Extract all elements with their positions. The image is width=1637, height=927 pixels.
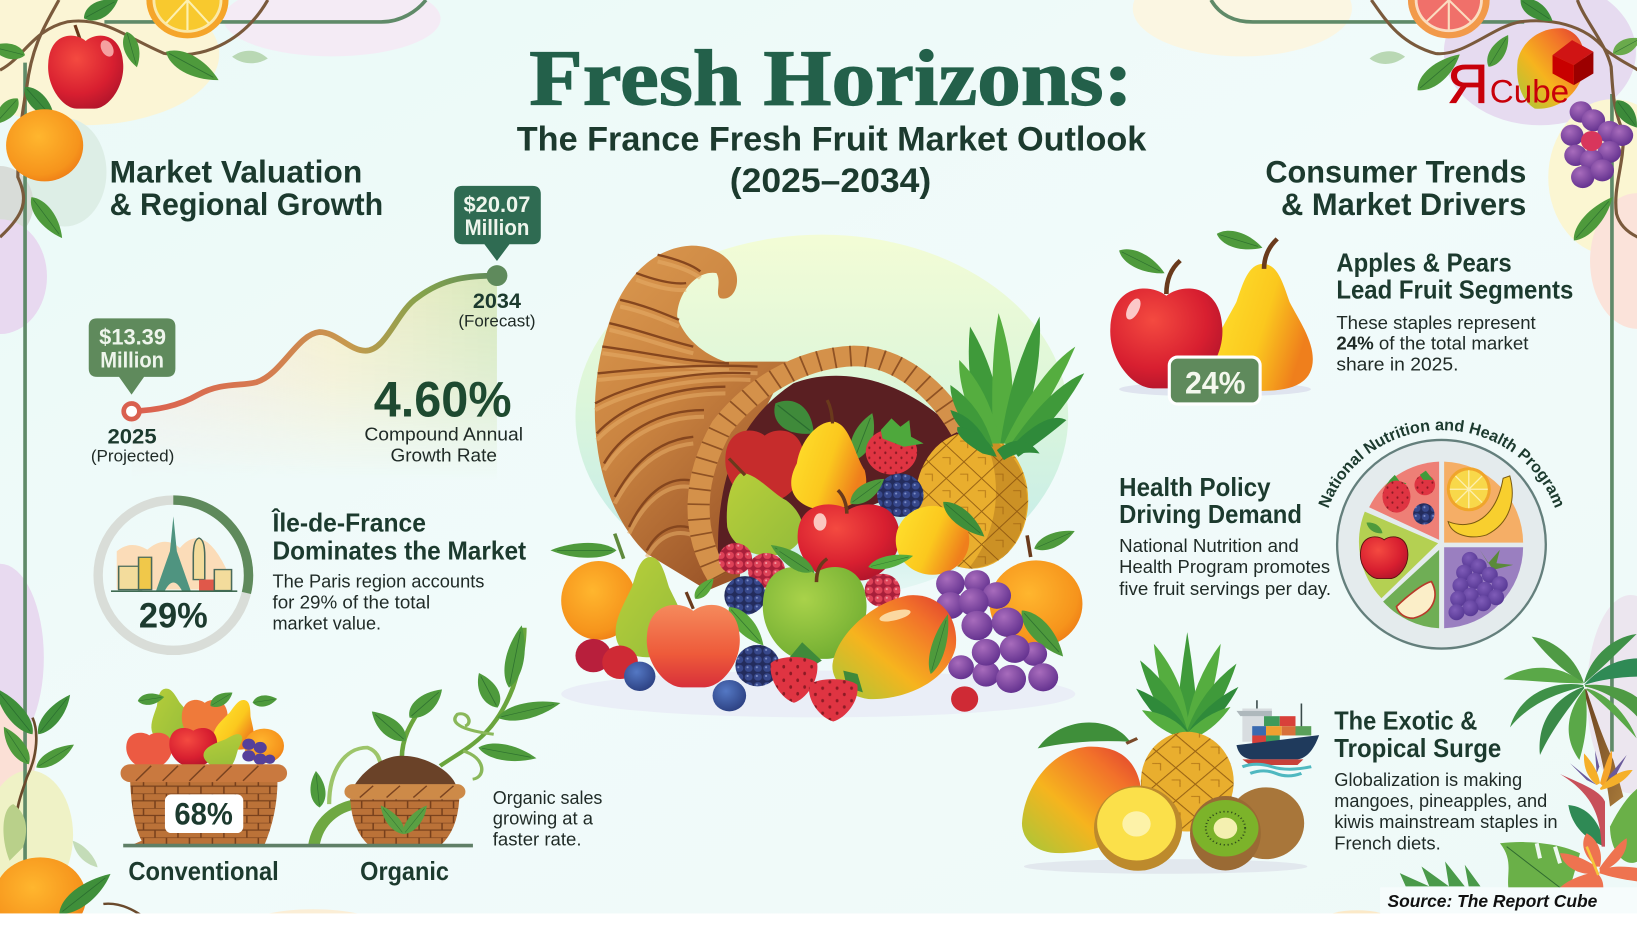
line chart: market growth 2025 to 2034 <box>89 186 541 491</box>
text block: health policy <box>1119 474 1331 599</box>
label: 2025 <box>91 426 174 465</box>
text: organic sales note <box>493 787 602 850</box>
text block: apples and pears: share in 2025. <box>1336 354 1458 375</box>
label: 2025: (Projected) <box>91 446 174 465</box>
panel: conventional vs organic baskets <box>121 624 602 886</box>
stat: CAGR: Growth Rate <box>390 444 497 465</box>
icon: grapes <box>1561 101 1633 188</box>
source panel <box>1380 887 1637 914</box>
pineapple <box>915 313 1084 569</box>
start point marker <box>124 403 139 419</box>
logo: RCube <box>1447 40 1593 114</box>
icon: conventional fruit basket <box>121 685 287 846</box>
text: organic sales note: growing at a <box>493 808 594 829</box>
label: 2034: 2034 <box>473 290 521 313</box>
label: 2025: 2025 <box>108 426 157 449</box>
logo: RCube: Cube <box>1490 73 1569 109</box>
bottom-right tropical foliage <box>1400 634 1637 888</box>
text block: apples and pears: These staples represent <box>1336 312 1536 333</box>
text block: Île-de-France: market value. <box>272 612 381 633</box>
grapes <box>936 570 1058 693</box>
bottom white strip <box>0 913 1637 927</box>
donut: Île-de-France share <box>98 500 249 650</box>
text block: exotic and tropical: French diets. <box>1334 833 1441 854</box>
text: organic sales note: Organic sales <box>493 787 602 808</box>
illustration: cornucopia of fruit <box>550 235 1084 722</box>
label: Organic: Organic <box>360 856 449 886</box>
icon: palm tree <box>1503 634 1637 807</box>
text block: Île-de-France: Dominates the Market <box>272 538 527 566</box>
berries <box>575 639 611 672</box>
text block: health policy: five fruit servings per day. <box>1119 578 1331 599</box>
text: organic sales note: faster rate. <box>493 829 582 850</box>
text block: Île-de-France: The Paris region accounts <box>272 571 484 592</box>
icon: mango <box>1517 28 1584 109</box>
green backing leaves <box>1610 787 1637 863</box>
curved plate label: National Nutrition and Health Program <box>1318 420 1562 508</box>
text block: apples and pears: Lead Fruit Segments <box>1336 277 1573 305</box>
label: 2034 <box>458 290 536 331</box>
text block: apples and pears: 24% of the total market <box>1336 333 1528 354</box>
shadow <box>561 671 1075 717</box>
text block: health policy: Health Program promotes <box>1119 556 1330 577</box>
pineapple slice <box>1094 786 1182 871</box>
mango <box>832 595 956 699</box>
text block: health policy: National Nutrition and <box>1119 535 1299 556</box>
orange right <box>990 560 1082 647</box>
label: 2034: (Forecast) <box>458 312 536 331</box>
icon: organic basket with soil <box>344 756 465 846</box>
callout: 2034 value: Million <box>465 215 529 240</box>
heading: consumer trends: & Market Drivers <box>1281 187 1526 222</box>
icon: apple and pear with 24% badge <box>1110 226 1313 404</box>
text block: health policy: Health Policy <box>1119 474 1271 502</box>
source note: Source: The Report Cube <box>1387 891 1597 911</box>
whole kiwi <box>1228 787 1304 859</box>
top-right fruit vine and logo base <box>1370 0 1637 246</box>
end point marker <box>487 265 507 286</box>
plate: national nutrition program <box>1318 420 1562 650</box>
text block: apples and pears <box>1336 249 1573 375</box>
donut: Île-de-France share: 29% <box>139 595 208 635</box>
text block: exotic and tropical: The Exotic & <box>1334 708 1477 736</box>
kiwi half <box>1190 796 1261 870</box>
text block: Île-de-France <box>271 507 527 633</box>
subtitle: (2025–2034) <box>730 162 931 200</box>
raspberry back <box>866 429 917 475</box>
heading: consumer trends: Consumer Trends <box>1265 155 1526 190</box>
heading: market valuation <box>110 155 383 222</box>
stat: CAGR <box>364 372 523 465</box>
halo circle <box>575 235 1068 599</box>
stat: CAGR: Compound Annual <box>364 424 523 445</box>
heading: consumer trends <box>1265 155 1526 222</box>
callout: 2025 value <box>89 318 175 395</box>
icon: monstera leaf <box>1500 842 1580 888</box>
pineapple crown <box>1136 632 1238 737</box>
icon: bird of paradise flower <box>1560 750 1633 847</box>
horn of plenty <box>595 246 965 590</box>
bottom-left branch and orange <box>0 683 142 927</box>
logo: RCube: Я <box>1447 53 1489 114</box>
stat: CAGR: 4.60% <box>374 372 512 428</box>
heading: market valuation: Market Valuation <box>110 155 362 190</box>
callout: 2034 value <box>454 186 541 261</box>
icon: apple and pear with 24% badge: 24% <box>1185 366 1245 401</box>
subtitle <box>517 120 1147 200</box>
mango <box>1022 723 1142 853</box>
text block: exotic and tropical <box>1334 708 1558 854</box>
top-left fruit vine <box>0 0 268 243</box>
text block: apples and pears: Apples & Pears <box>1336 249 1512 277</box>
heading: market valuation: & Regional Growth <box>110 187 383 222</box>
text block: exotic and tropical: Globalization is making <box>1334 769 1522 790</box>
icon: hibiscus flower <box>1560 833 1637 888</box>
icon: tropical fruit group <box>1022 632 1319 874</box>
text block: Île-de-France: for 29% of the total <box>272 592 430 613</box>
text block: exotic and tropical: kiwis mainstream staples in <box>1334 811 1558 832</box>
orange left <box>561 561 636 640</box>
text block: exotic and tropical: mangoes, pineapples, and <box>1334 790 1547 811</box>
callout: 2025 value: Million <box>100 347 164 372</box>
text block: Île-de-France: Île-de-France <box>271 507 426 537</box>
icon: red apple <box>48 25 123 109</box>
container ship <box>1236 700 1319 776</box>
title: Fresh Horizons: <box>529 34 1133 122</box>
icon: orange <box>6 109 83 181</box>
label: Conventional: Conventional <box>128 856 279 886</box>
text block: health policy: Driving Demand <box>1119 501 1302 529</box>
icon: lemon slice <box>146 0 229 38</box>
fruit pile <box>550 393 1082 722</box>
icon: sprouting vine <box>309 624 563 846</box>
icon: Paris skyline <box>111 516 237 591</box>
callout: 2034 value: $20.07 <box>464 192 530 217</box>
subtitle: The France Fresh Fruit Market Outlook <box>517 120 1147 158</box>
icon: orange <box>0 857 86 927</box>
icon: grapefruit slice <box>1408 0 1490 38</box>
icon: fern fronds <box>1400 861 1480 886</box>
plate with fruit sectors <box>1337 440 1546 649</box>
label: 68%: 68% <box>174 797 233 832</box>
callout: 2025 value: $13.39 <box>99 324 166 349</box>
text block: exotic and tropical: Tropical Surge <box>1334 735 1501 763</box>
